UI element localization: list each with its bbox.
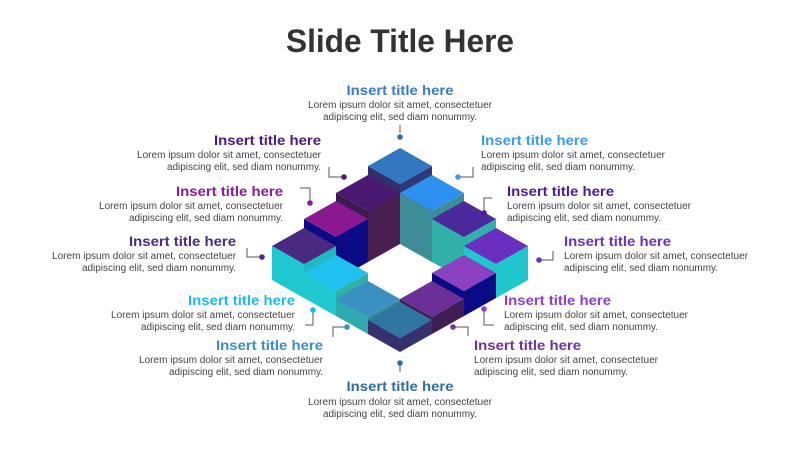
block: dark purple [336,175,400,262]
item: left 2: Lorem ipsum dolor sit amet, consectetuer [99,201,284,212]
item: left 4: Insert title here [188,292,295,308]
block: light blue [400,175,464,262]
item: right 2 [481,183,692,224]
item: left 2: adipiscing elit, sed diam nonummy. [129,213,283,224]
item: bottom: Insert title here [346,378,454,394]
item: left 1: Lorem ipsum dolor sit amet, consectetuer [137,150,322,161]
item: top [308,82,493,140]
item: left 5 [139,324,350,378]
item: bottom [308,360,493,420]
item: right 5: Insert title here [474,337,581,353]
item: left 4 [111,292,316,333]
item: right 5 [450,324,659,378]
item: left 5: adipiscing elit, sed diam nonummy. [169,367,323,378]
block: light purple [432,255,496,316]
item: left 3: Insert title here [129,233,236,249]
item: right 2: Insert title here [507,183,614,199]
item: right 1: adipiscing elit, sed diam nonummy. [481,162,635,173]
item: right 1 [455,132,666,180]
item: right 3: Lorem ipsum dolor sit amet, consectetuer [564,251,749,262]
item: right 2: adipiscing elit, sed diam nonummy. [507,213,661,224]
item: top: Lorem ipsum dolor sit amet, consectetuer [308,100,493,111]
item: left 4: adipiscing elit, sed diam nonummy. [141,322,295,333]
item: left 1: Insert title here [214,132,321,148]
item: right 5: Lorem ipsum dolor sit amet, consectetuer [474,355,659,366]
item: left 1 [137,132,347,180]
item: right 1: Lorem ipsum dolor sit amet, consectetuer [481,150,666,161]
item: left 2: Insert title here [176,183,283,199]
block: dark violet [400,281,464,334]
item: right 5: adipiscing elit, sed diam nonummy. [474,367,628,378]
block: purple right [464,228,528,298]
block: top [368,148,432,244]
item: left 3: adipiscing elit, sed diam nonummy. [82,263,236,274]
block: cyan [304,255,368,316]
item: right 4: Insert title here [504,292,611,308]
graphic: isometric block ring [272,148,528,352]
item: top: Insert title here [346,82,454,98]
item: right 3 [536,233,749,274]
item: right 1: Insert title here [481,132,588,148]
item: left 4: Lorem ipsum dolor sit amet, consectetuer [111,310,296,321]
item: right 4 [481,292,689,333]
item: right 4: Lorem ipsum dolor sit amet, consectetuer [504,310,689,321]
item: left 3: Lorem ipsum dolor sit amet, consectetuer [52,251,237,262]
item: left 5: Lorem ipsum dolor sit amet, consectetuer [139,355,324,366]
title: Slide Title Here [286,23,514,59]
block: indigo right [432,201,496,280]
block: bottom [368,302,432,352]
item: right 3: Insert title here [564,233,671,249]
item: right 4: adipiscing elit, sed diam nonummy. [504,322,658,333]
item: left 1: adipiscing elit, sed diam nonummy. [167,162,321,173]
item: right 2: Lorem ipsum dolor sit amet, consectetuer [507,201,692,212]
item: top: adipiscing elit, sed diam nonummy. [323,112,477,123]
item: bottom: Lorem ipsum dolor sit amet, consectetuer [308,397,493,408]
block: magenta [304,201,368,280]
block: steel [336,281,400,334]
item: right 3: adipiscing elit, sed diam nonummy. [564,263,718,274]
item: left 5: Insert title here [216,337,323,353]
item: bottom: adipiscing elit, sed diam nonummy. [323,409,477,420]
item: left 2 [99,183,313,224]
item: left 3 [52,233,265,274]
block: indigo left [272,228,336,298]
